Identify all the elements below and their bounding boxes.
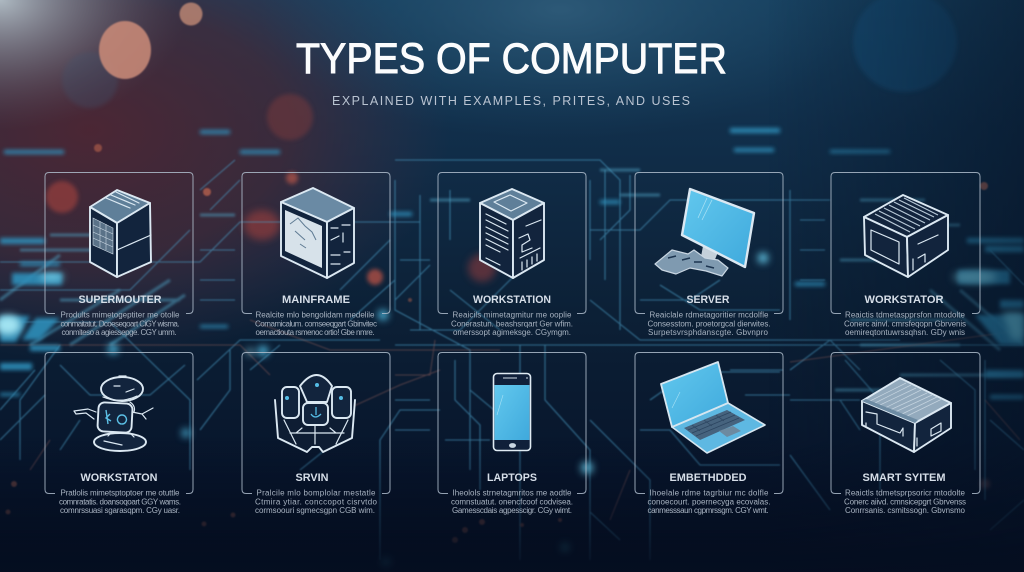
- panel: server: [635, 172, 783, 337]
- description: [451, 310, 573, 337]
- description: [844, 488, 966, 515]
- description: Surpetsvrsphdanscgte. Gbvnpro: [648, 328, 769, 337]
- heading: SRVIN: [296, 472, 329, 484]
- description: Conerastun. beashsrqart Ger wfim.: [451, 320, 573, 328]
- heading: SMART SYITEM: [862, 472, 946, 484]
- icon: server monitor and keyboard: [655, 189, 754, 276]
- description: Iheolols strnetagmritos me aodtle: [452, 488, 572, 498]
- description: Reaictls tdmetsprpsoricr mtodolte: [845, 488, 966, 498]
- description: Realcite mlo bengolidam medelile: [256, 310, 375, 320]
- description: [648, 310, 770, 337]
- panel: laptops: [438, 352, 586, 515]
- description: [648, 488, 770, 515]
- description: cormsoouri sgmecsgpn CGB wim.: [255, 506, 375, 515]
- description: oemactiouta rsmenoc ortio! Gbe nmre.: [256, 328, 374, 337]
- panel: workstator: [831, 172, 980, 337]
- description: Pratlolis mimetsptoptoer me otuttle: [60, 488, 180, 498]
- heading: WORKSTATOR: [864, 294, 944, 306]
- description: Cornamicalum. comseeqgart Gbinvitec: [255, 320, 377, 328]
- description: canmesssaun cgpmrssgm. CGY wmt.: [648, 506, 768, 515]
- icon: smartphone: [494, 374, 530, 450]
- heading: SUPERMOUTER: [78, 294, 162, 306]
- panel: mainframe: [242, 172, 390, 337]
- description: Prodults mimetogeptiter me otolle: [60, 310, 180, 320]
- icon: supercomputer tower: [90, 190, 151, 277]
- description: conoecourt. poernecyga ecovalas.: [648, 498, 770, 506]
- panel: workstaton robot: [45, 352, 193, 515]
- description: [60, 310, 180, 337]
- panel: srvin: [242, 352, 390, 515]
- description: Gamesscdais agpesscigr. CGy wimt.: [452, 506, 572, 515]
- description: Consesstom. proetorgcal dierwites.: [648, 320, 770, 328]
- subtitle: EXPLAINED WITH EXAMPLES, PRITES, AND USES: [332, 94, 690, 108]
- icon: workstation tower: [480, 189, 544, 278]
- icon: mainframe cabinet: [281, 188, 354, 278]
- description: conmiteso a agiessepge. CGY umm.: [62, 328, 176, 337]
- icon: workstation cube: [864, 195, 948, 277]
- panel: workstation: [438, 172, 586, 337]
- description: Reaictis tdmetaspprsfon mtodolte: [845, 310, 966, 320]
- description: Pralcile mlo bomplolar mestatle: [256, 488, 376, 498]
- description: conmaitatut. Dcoeseqoart CiGY wisma.: [60, 320, 180, 328]
- description: comnratatis. doansoqoart GGY wams.: [59, 498, 181, 506]
- icon: laptop: [661, 362, 765, 453]
- description: Ihoelale rdme tagrbiur mc dolfle: [650, 488, 769, 498]
- panel: smart system: [831, 352, 980, 515]
- description: Reaiclale rdmetagoritier mcdolfle: [650, 310, 769, 320]
- icon: smart system box: [862, 378, 951, 452]
- heading: LAPTOPS: [487, 472, 537, 484]
- heading: WORKSTATON: [80, 472, 158, 484]
- heading: WORKSTATION: [473, 294, 551, 306]
- heading: MAINFRAME: [282, 294, 350, 306]
- title: TYPES OF COMPUTER: [296, 35, 727, 83]
- description: omerssopt agimeksge. CGymgm.: [453, 328, 571, 337]
- description: Reaicils mimetagmitur me ooplie: [452, 310, 572, 320]
- description: [255, 310, 377, 337]
- description: comnrssuasi sgarasqpm. CGy uasr.: [60, 506, 180, 515]
- icon: robot: [74, 376, 153, 451]
- heading: SERVER: [686, 294, 730, 306]
- description: Conerc aiivd. cmnsicepgrt Gbrvenss: [844, 498, 966, 506]
- heading: EMBETHDDED: [670, 472, 747, 484]
- description: [255, 488, 378, 515]
- panel: supercomputer: [45, 172, 193, 337]
- description: comnstuatut. onencfcoof codvisea.: [451, 498, 573, 506]
- description: [451, 488, 573, 515]
- description: Conerc ainvl. cmrsfeqopn Gbrvenis: [844, 320, 966, 328]
- description: [844, 310, 966, 337]
- description: Conrrsanis. csmitssogn. Gbvnsmo: [845, 506, 966, 515]
- description: [59, 488, 181, 515]
- icon: server array: [275, 375, 355, 452]
- description: Ctmira ytiar. conccopot cisrvtdo: [255, 498, 378, 506]
- description: oemireqtontuwrssqhsn. GDy wnis: [845, 328, 965, 337]
- panel: embethdded: [635, 352, 783, 515]
